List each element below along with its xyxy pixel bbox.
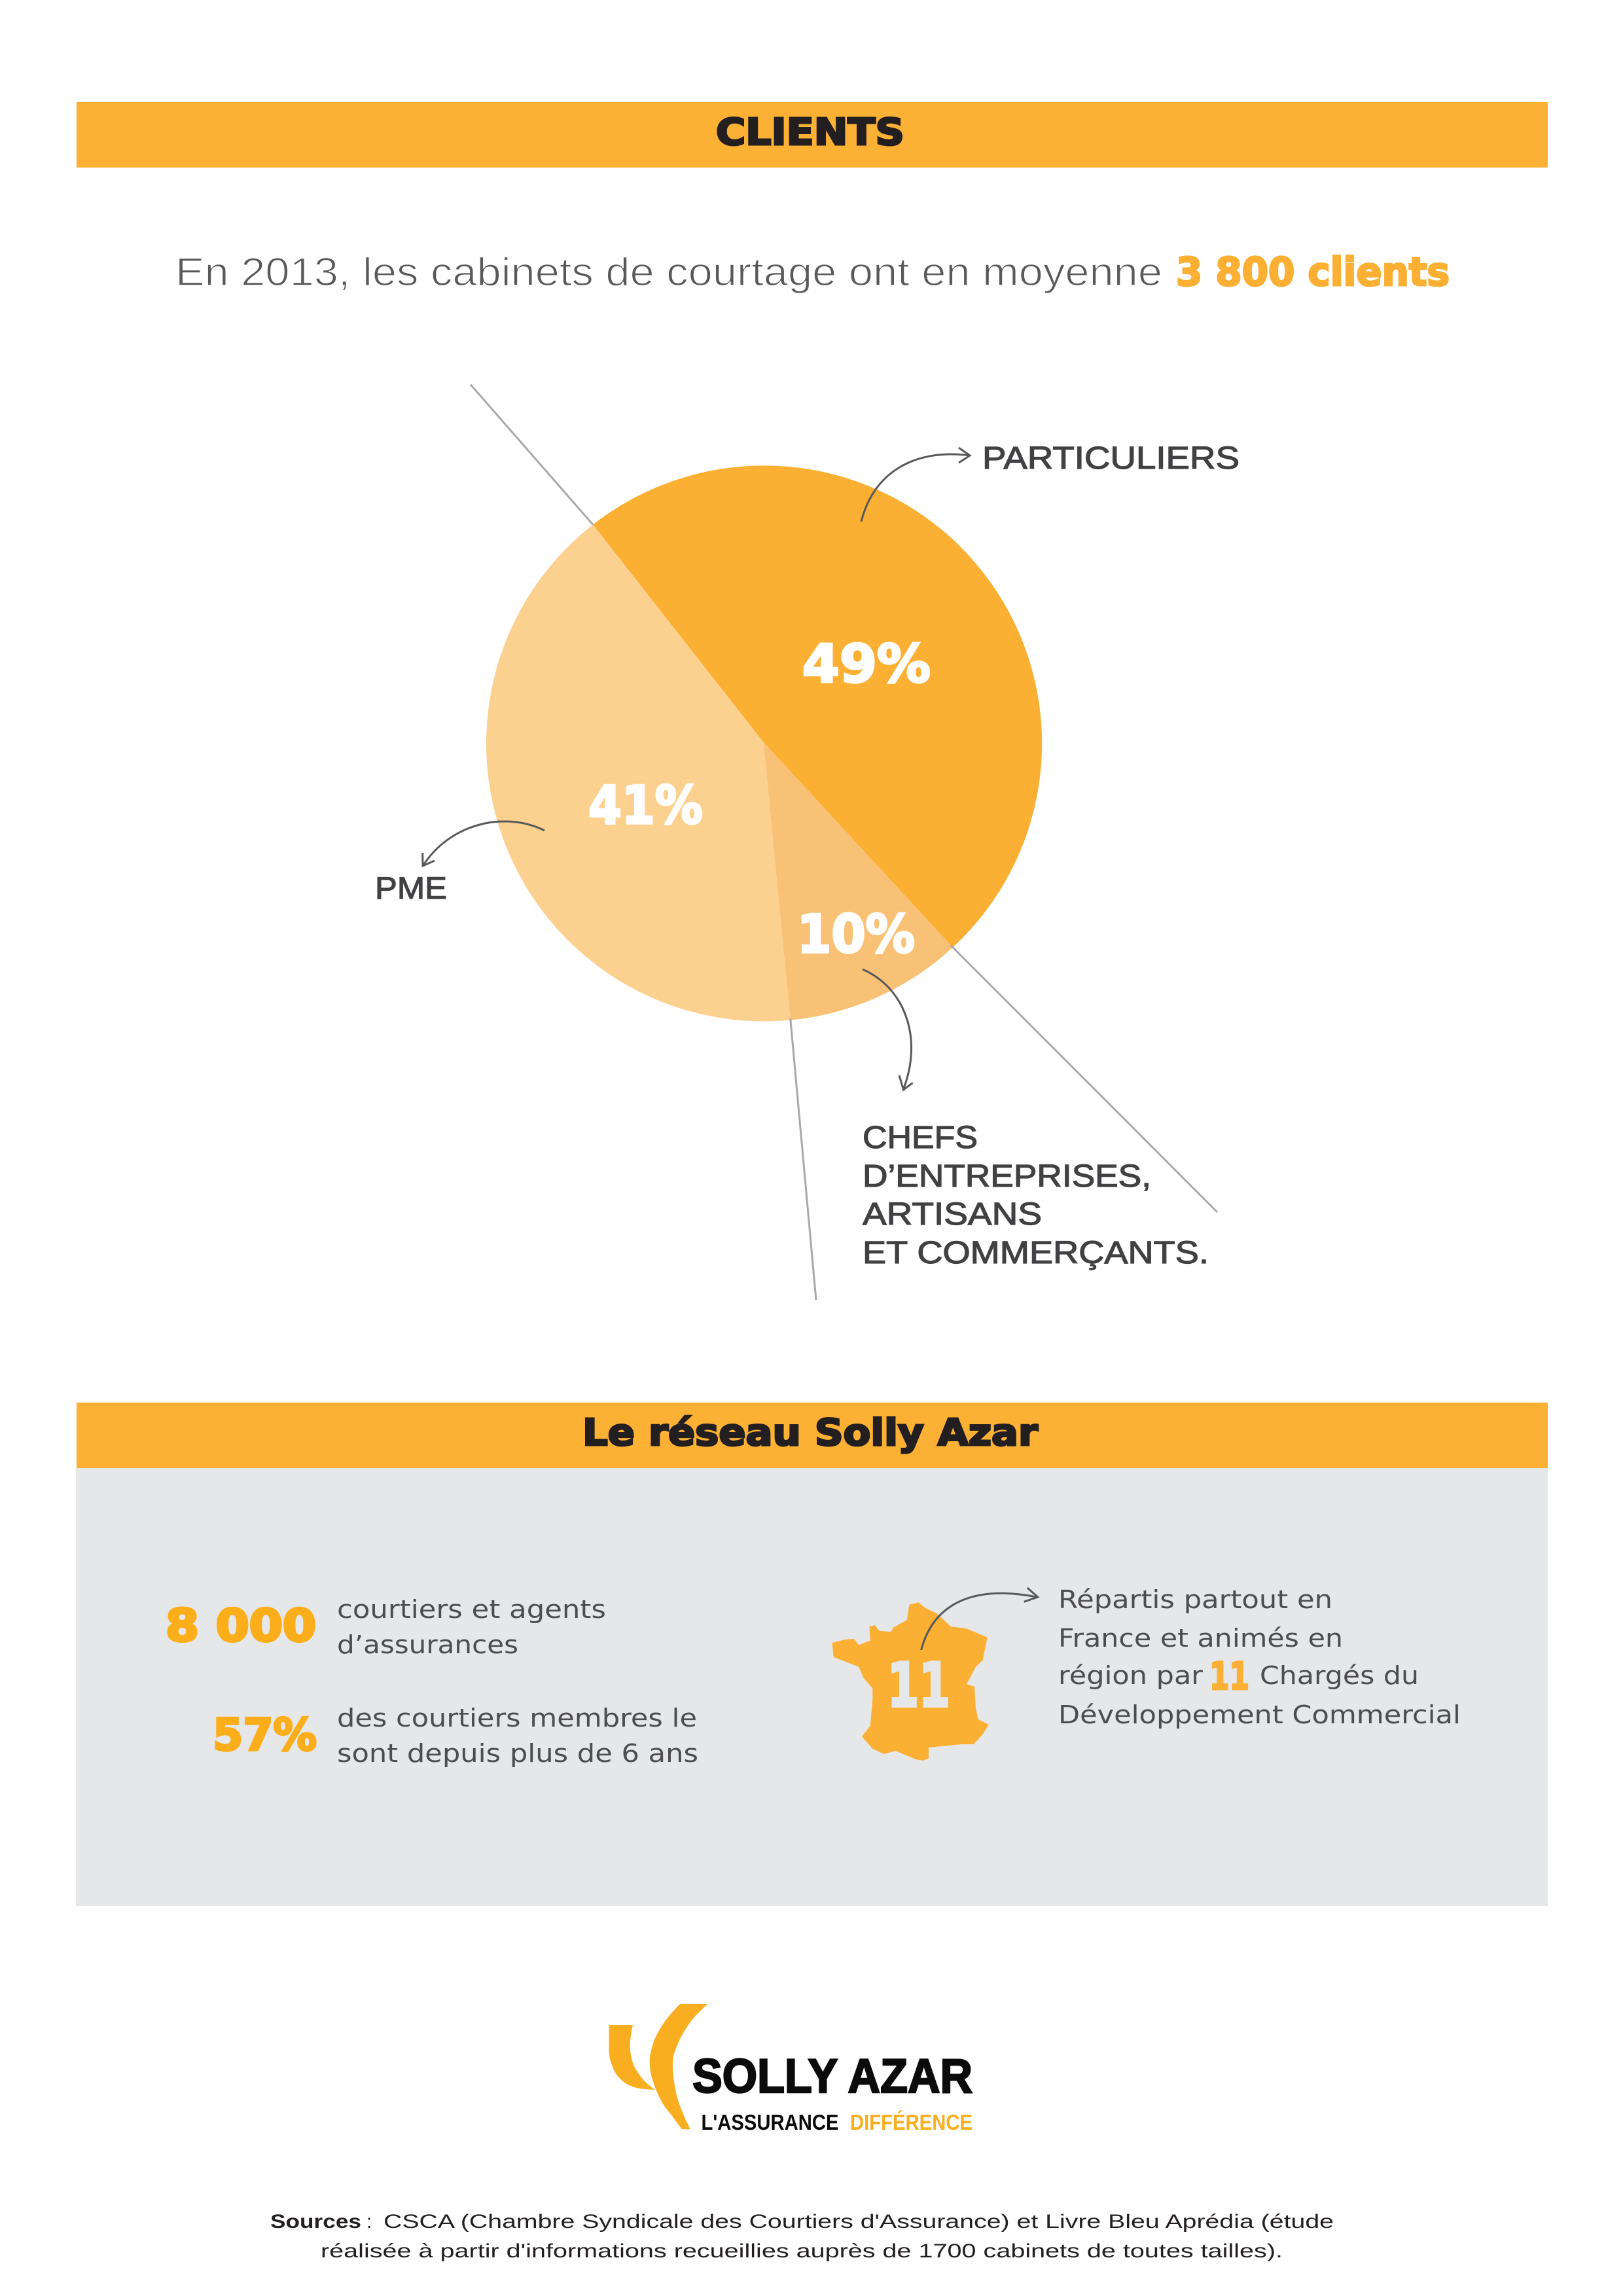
logo tagline (702, 2110, 972, 2134)
stat: 8 000 courtiers (166, 1595, 606, 1659)
text block: répartis partout en France: Développement Commercial (1058, 1700, 1461, 1729)
headline: average clients: En 2013, les cabinets de courtage ont en moyenne (175, 250, 1162, 294)
heading band: clients (77, 102, 1548, 168)
text block: répartis partout en France: 11 (1209, 1654, 1249, 1698)
label: chefs d'entreprises, artisans et commerçants: ARTISANS (863, 1197, 1042, 1232)
text block: répartis partout en France: Répartis partout en (1058, 1585, 1332, 1614)
label: PME: PME (375, 870, 447, 905)
text block: répartis partout en France: France et animés en (1058, 1624, 1343, 1653)
panel: le réseau Solly Azar (76, 1468, 1548, 1906)
text block: répartis partout en France: région par (1058, 1661, 1203, 1690)
icon: map of France with 11: 11 (887, 1650, 950, 1721)
value: 10%: 10% (797, 904, 915, 965)
headline: average clients (175, 249, 1450, 295)
arrow: to particuliers (861, 448, 970, 522)
value: 49%: 49% (802, 634, 931, 694)
heading band: clients: CLIENTS (716, 111, 904, 154)
slice: particuliers 49% (593, 465, 1042, 948)
stat: 57% des courtiers: sont depuis plus de 6 ans (337, 1739, 698, 1768)
logo tagline: DIFFÉRENCE (850, 2110, 972, 2134)
logo tagline: L'ASSURANCE (702, 2110, 839, 2134)
sources: CSCA (Chambre Syndicale des Courtiers d'Assurance) et Livre Bleu Aprédia (étude (383, 2211, 1334, 2233)
label: chefs d'entreprises, artisans et commerçants: D’ENTREPRISES, (863, 1159, 1151, 1194)
icon: map of France with 11 (832, 1602, 989, 1761)
label: chefs d'entreprises, artisans et commerçants: ET COMMERÇANTS. (863, 1236, 1209, 1270)
label: chefs d'entreprises, artisans et commerçants: CHEFS (863, 1121, 978, 1155)
value: 41%: 41% (588, 775, 703, 836)
stat: 8 000 courtiers: courtiers et agents (337, 1595, 606, 1624)
logo wordmark: SOLLY AZAR (692, 2050, 972, 2103)
stat: 8 000 courtiers: 8 000 (166, 1600, 316, 1652)
pie chart: client breakdown (471, 385, 1217, 1300)
label: chefs d'entreprises, artisans et commerçants (863, 1121, 1209, 1270)
heading band: le réseau Solly Azar: Le réseau Solly Azar (582, 1412, 1038, 1454)
label: particuliers: PARTICULIERS (982, 441, 1240, 476)
slice: PME 41% (486, 525, 791, 1022)
stat: 57% des courtiers: des courtiers membres le (337, 1704, 697, 1732)
arrow: to chefs d'entreprises (863, 969, 912, 1090)
sources: réalisée à partir d'informations recueillies auprès de 1700 cabinets de toutes tailles). (321, 2240, 1283, 2262)
text block: répartis partout en France: Chargés du (1260, 1661, 1419, 1690)
arrow: to PME (423, 821, 544, 866)
stat: 57% des courtiers (213, 1704, 698, 1768)
headline: average clients: 3 800 clients (1176, 249, 1450, 295)
stat: 57% des courtiers: 57% (213, 1710, 317, 1761)
sources (270, 2211, 1334, 2262)
sources: Sources (270, 2211, 361, 2233)
logo: Solly Azar (609, 2004, 972, 2134)
stat: 8 000 courtiers: d’assurances (337, 1630, 518, 1659)
heading band: le réseau Solly Azar (77, 1403, 1548, 1468)
slice: chefs d'entreprises 10% (763, 742, 953, 1020)
sources: : (366, 2211, 372, 2233)
text block: répartis partout en France (1058, 1585, 1461, 1729)
arrow: France to text (921, 1588, 1038, 1650)
logo mark: swooshes (609, 2004, 707, 2129)
